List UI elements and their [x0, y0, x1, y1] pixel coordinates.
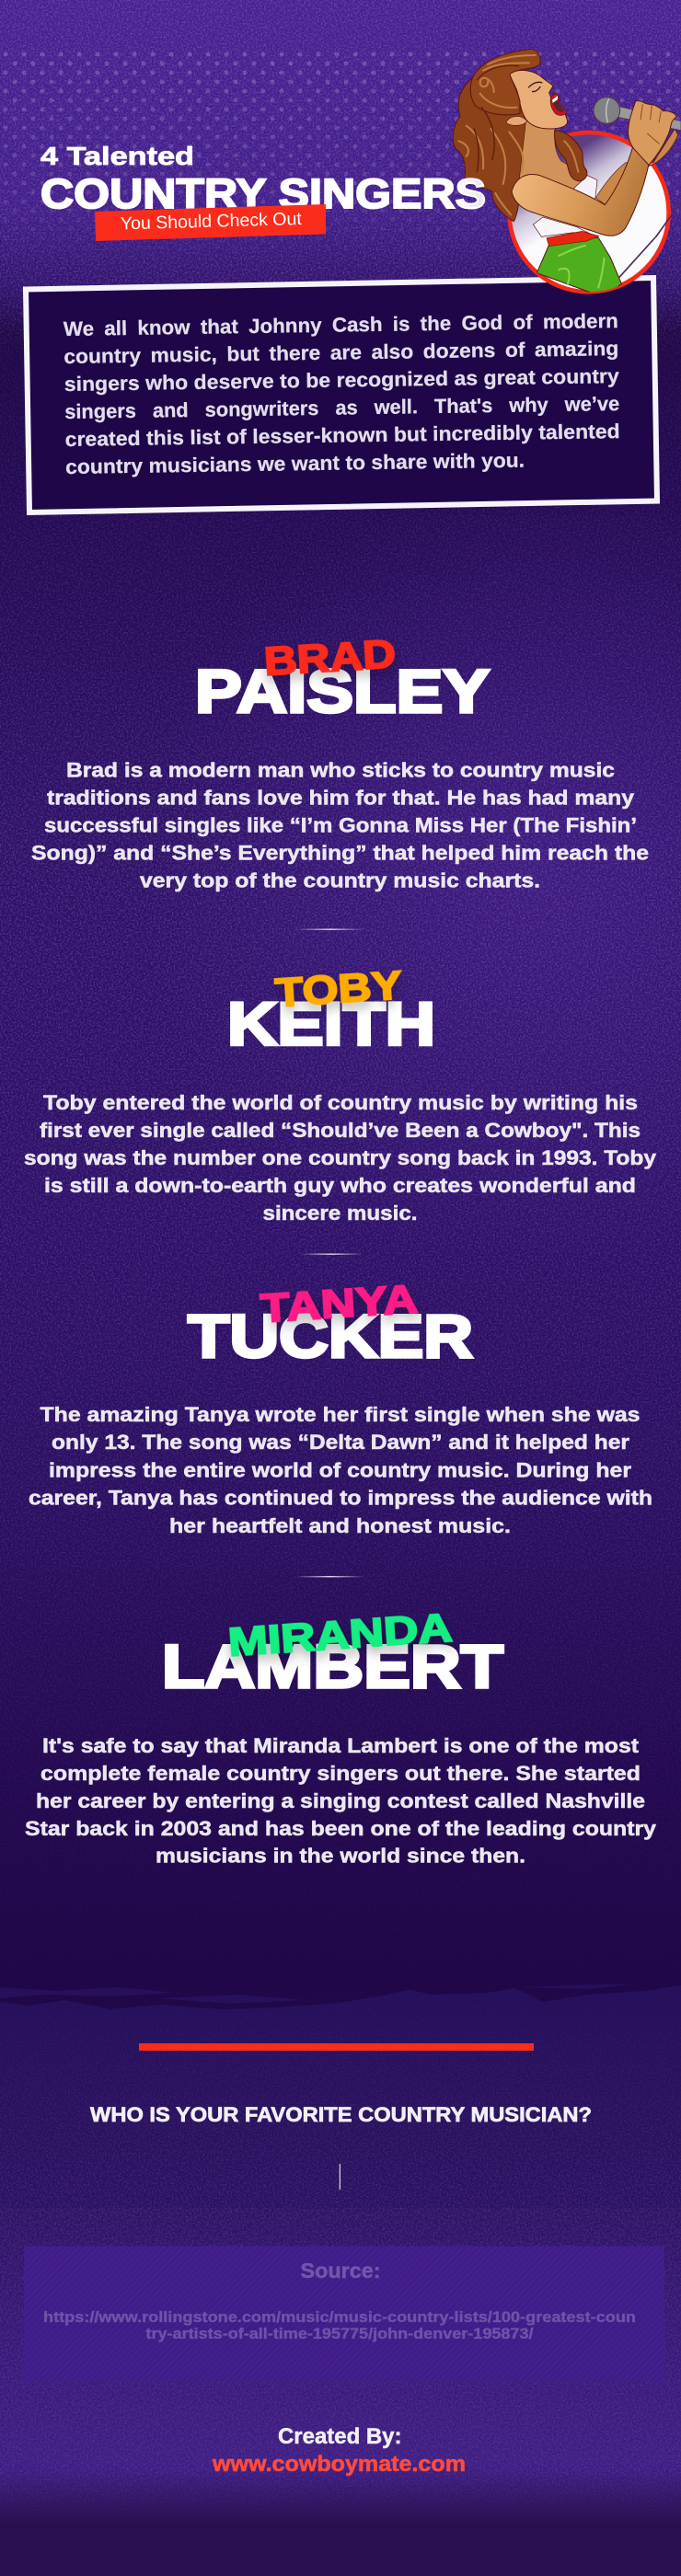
singer 3: Tanya Tucker	[29, 1276, 652, 1537]
microphone	[594, 98, 681, 131]
surname: KEITH	[227, 990, 435, 1058]
red divider bar	[139, 2043, 534, 2051]
description: only 13. The song was “Delta Dawn” and it helped her	[52, 1431, 629, 1454]
intro text: country musicians we want to share with you.	[65, 449, 525, 478]
description: Star back in 2003 and has been one of the leading country	[25, 1817, 657, 1840]
source heading: Source:	[300, 2259, 381, 2283]
singer 4: Miranda Lambert	[25, 1604, 657, 1868]
description: her career by entering a singing contest called Nashville	[36, 1789, 645, 1812]
source panel	[24, 2247, 664, 2382]
first name: TANYA	[260, 1276, 419, 1331]
fingers	[641, 104, 661, 144]
intro text: singers who deserve to be recognized as great country	[64, 364, 620, 396]
face	[509, 70, 568, 129]
red belt	[547, 231, 599, 247]
surname: LAMBERT	[162, 1632, 503, 1700]
red circle badge	[509, 132, 669, 292]
description: Song)” and “She’s Everything” that helped him reach the	[31, 841, 649, 865]
lower back hair	[453, 76, 543, 222]
description: Toby entered the world of country music by writing his	[43, 1091, 638, 1114]
first name: TOBY	[274, 962, 403, 1016]
first name: BRAD	[263, 631, 397, 684]
description	[25, 1734, 657, 1868]
title line: 4 Talented: 4 Talented	[40, 142, 194, 170]
surname: PAISLEY	[195, 657, 490, 725]
intro text: We all know that Johnny Cash is the God of modern	[63, 309, 618, 340]
description	[24, 1091, 657, 1225]
red subtitle tag	[95, 204, 326, 241]
singer 1: Brad Paisley	[31, 631, 649, 892]
intro panel	[26, 278, 657, 512]
hand	[629, 101, 676, 165]
source url	[43, 2309, 636, 2342]
closing question: WHO IS YOUR FAVORITE COUNTRY MUSICIAN?	[90, 2103, 592, 2126]
description: her heartfelt and honest music.	[169, 1514, 511, 1537]
description: Brad is a modern man who sticks to country music	[66, 758, 615, 782]
description: It's safe to say that Miranda Lambert is one of the most	[42, 1734, 640, 1757]
source url: try-artists-of-all-time-195775/john-denver-195873/	[145, 2326, 534, 2342]
right hair lock	[555, 131, 587, 181]
intro text	[63, 309, 621, 478]
intro text: singers and songwriters as well. That's why we’ve	[64, 392, 619, 423]
white bodice	[573, 176, 597, 200]
created by label: Created By:	[278, 2424, 401, 2449]
skirt highlights	[559, 246, 605, 288]
mouth	[550, 94, 567, 115]
title line: country singers: COUNTRY SINGERS	[40, 170, 486, 217]
microphone cable	[619, 201, 681, 278]
first name: MIRANDA	[226, 1604, 454, 1665]
neck and chest	[518, 120, 595, 214]
description: song was the number one country song back in 1993. Toby	[24, 1146, 657, 1169]
description: traditions and fans love him for that. He has had many	[47, 786, 635, 810]
description: career, Tanya has continued to impress the audience with	[29, 1487, 652, 1509]
credits	[212, 2424, 466, 2477]
intro text: country music, but there are also dozens of amazing	[63, 337, 618, 368]
skirt	[537, 237, 621, 297]
description: The amazing Tanya wrote her first single when she was	[40, 1403, 641, 1426]
description: musicians in the world since then.	[156, 1844, 525, 1868]
website: www.cowboymate.com	[212, 2452, 466, 2477]
description	[29, 1403, 652, 1537]
description: sincere music.	[263, 1202, 418, 1225]
top hair	[470, 49, 540, 115]
description: very top of the country music charts.	[140, 868, 540, 892]
description	[31, 758, 649, 892]
illustration: singer with microphone	[453, 49, 681, 297]
description: complete female country singers out there. She started	[40, 1762, 641, 1785]
singer 2: Toby Keith	[24, 962, 657, 1225]
eye and brow	[528, 82, 542, 92]
surname: TUCKER	[188, 1302, 473, 1370]
hair highlights	[458, 55, 578, 214]
intro text: created this list of lesser-known but incredibly talented	[64, 420, 620, 451]
description: is still a down-to-earth guy who creates wonderful and	[44, 1174, 636, 1197]
ear	[506, 116, 527, 125]
description: impress the entire world of country music. During her	[49, 1459, 631, 1481]
far forearm	[595, 129, 678, 209]
red subtitle tag: You Should Check Out	[121, 209, 303, 234]
source url: https://www.rollingstone.com/music/music-country-lists/100-greatest-coun	[43, 2309, 636, 2326]
torn edge streaks	[0, 1984, 635, 2004]
near arm	[512, 148, 651, 236]
description: successful singles like “I’m Gonna Miss Her (The Fishin’	[44, 813, 637, 837]
title	[40, 142, 486, 217]
description: first ever single called “Should’ve Been a Cowboy". This	[40, 1119, 641, 1142]
